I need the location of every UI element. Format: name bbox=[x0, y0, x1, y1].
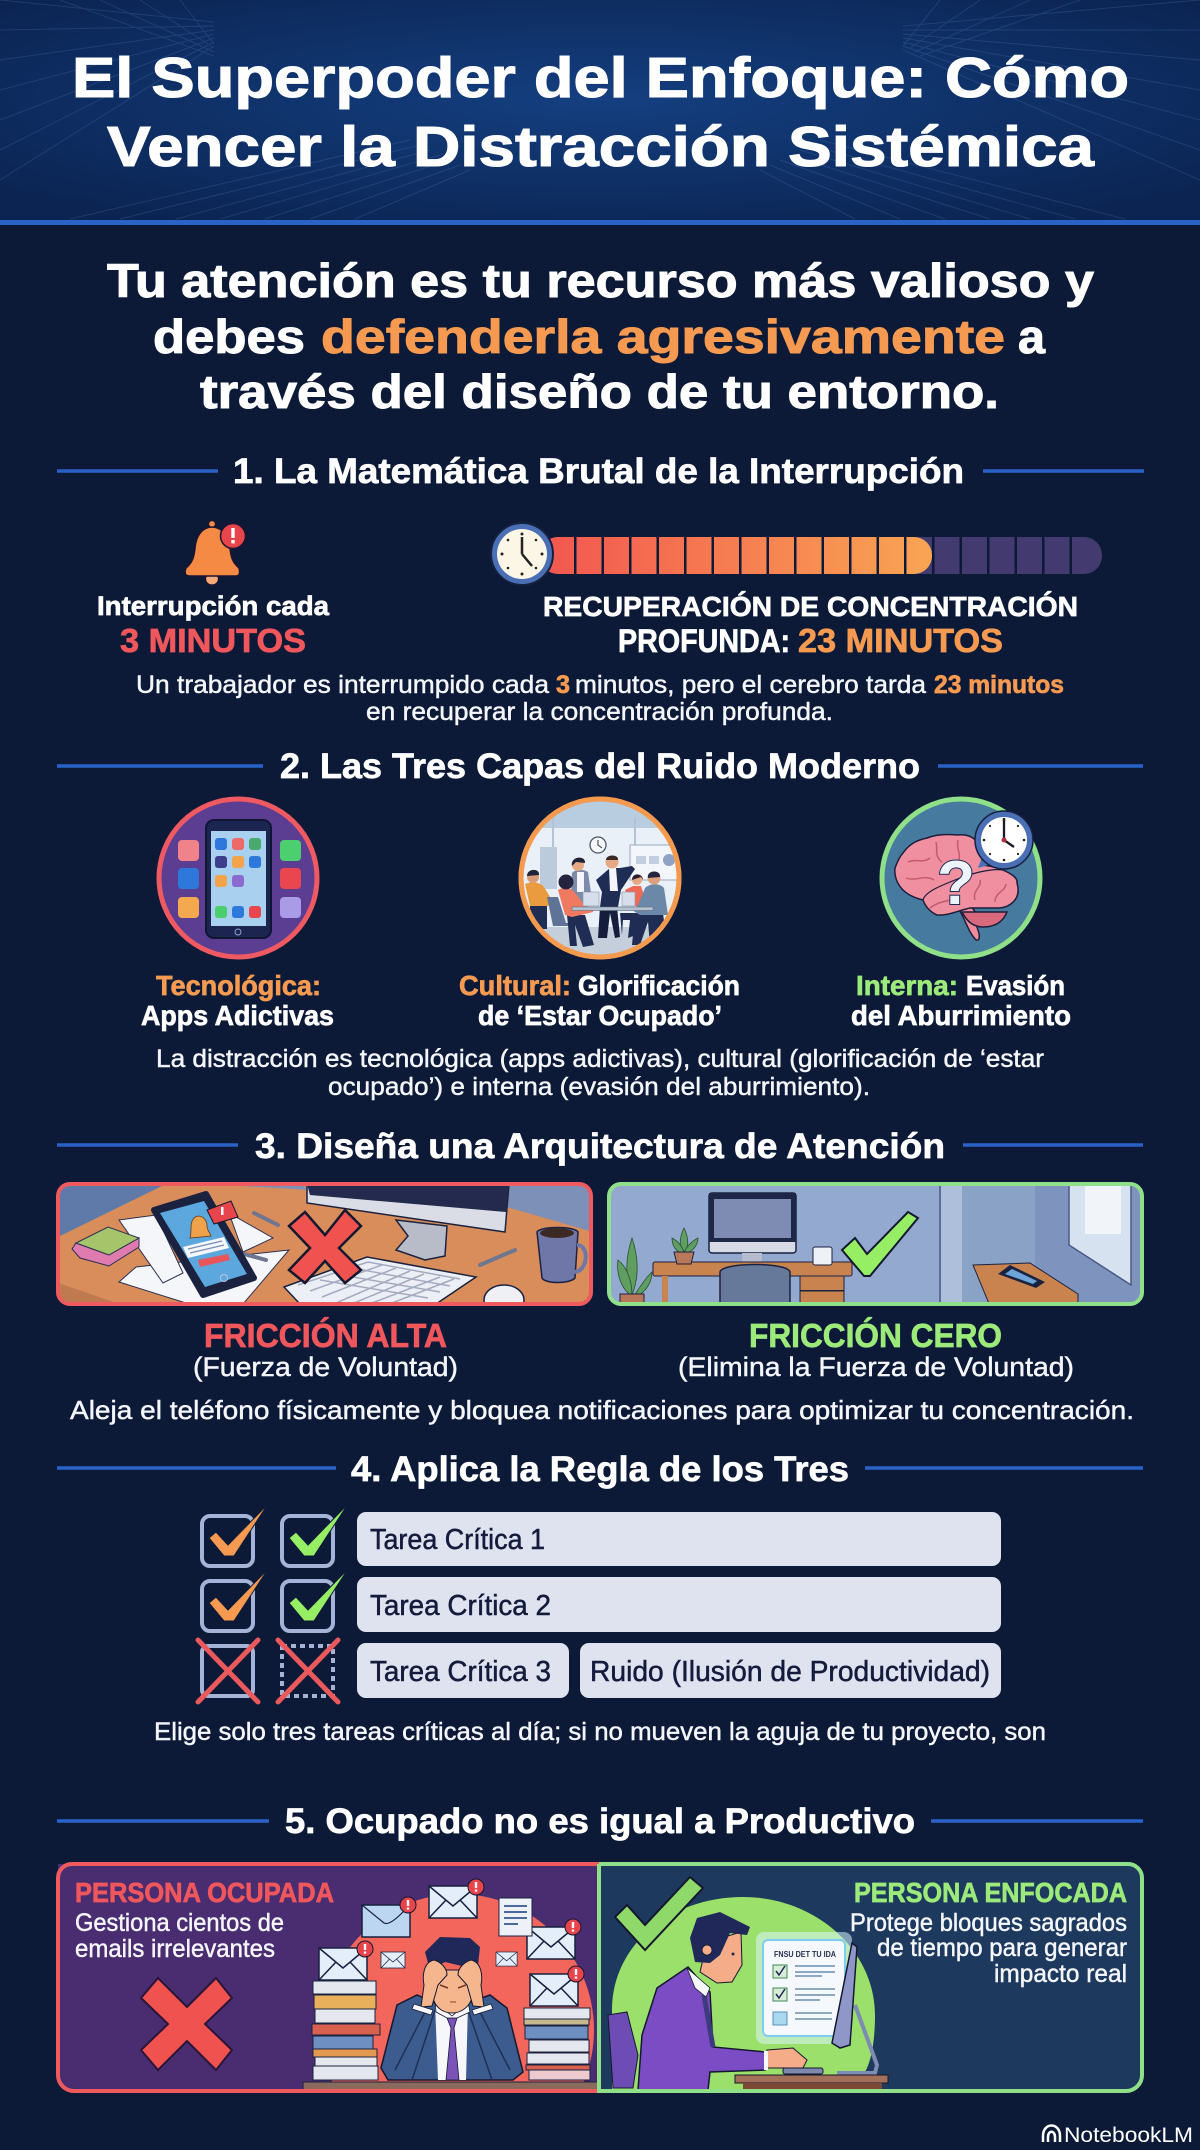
layer labels: Tecnológica: bbox=[156, 970, 321, 1001]
icon: clock bbox=[491, 523, 553, 585]
header band bbox=[0, 0, 1200, 221]
section 1 text: en recuperar la concentración profunda. bbox=[366, 698, 833, 726]
icon: brain and clock circle: ? bbox=[937, 849, 975, 918]
papers bbox=[119, 1213, 289, 1304]
friction labels: FRICCIÓN CERO bbox=[749, 1317, 1002, 1354]
focused man bbox=[638, 1912, 807, 2090]
section 1 heading: 1. La Matemática Brutal de la Interrupción bbox=[233, 452, 964, 491]
section 2 text bbox=[156, 1045, 1044, 1101]
interruption label: Interrupción cada bbox=[97, 591, 330, 621]
red cross bbox=[289, 1210, 361, 1283]
section 1 text: 3 bbox=[556, 671, 570, 699]
interruption label: 3 MINUTOS bbox=[120, 622, 306, 659]
monitor bbox=[832, 1943, 877, 2073]
checklist icons bbox=[198, 1504, 348, 1702]
mug bbox=[537, 1228, 586, 1282]
mouse bbox=[483, 1284, 525, 1302]
focused person text: Protege bloques sagrados bbox=[850, 1909, 1127, 1937]
section 1 text: minutos, pero el cerebro tarda bbox=[575, 671, 926, 699]
table and laptops bbox=[572, 892, 653, 910]
focused person text: impacto real bbox=[994, 1960, 1127, 1988]
section 1 text: Un trabajador es interrumpido cada bbox=[136, 671, 549, 699]
standing presenter bbox=[596, 856, 635, 938]
section 2 heading: 2. Las Tres Capas del Ruido Moderno bbox=[280, 747, 920, 786]
task list bbox=[357, 1512, 1001, 1698]
document bbox=[499, 1898, 532, 1936]
header rule bbox=[0, 220, 1200, 225]
busy person text bbox=[75, 1877, 334, 1963]
thesis statement: a bbox=[1018, 310, 1046, 363]
pen bbox=[480, 1250, 515, 1265]
interruption label bbox=[97, 591, 330, 659]
busy person text: emails irrelevantes bbox=[75, 1935, 275, 1963]
icon: bell bbox=[185, 520, 246, 585]
thesis statement: defenderla agresivamente bbox=[321, 310, 1005, 363]
layer labels: Glorificación bbox=[578, 970, 740, 1001]
recovery label: RECUPERACIÓN DE CONCENTRACIÓN bbox=[543, 591, 1078, 622]
green check bbox=[842, 1212, 918, 1276]
layer labels: de ‘Estar Ocupado’ bbox=[478, 1000, 722, 1031]
friction labels: FRICCIÓN ALTA bbox=[204, 1317, 447, 1354]
section 1 text bbox=[136, 671, 1064, 726]
recovery label: PROFUNDA: bbox=[618, 623, 790, 659]
thesis statement: debes bbox=[153, 310, 305, 363]
stacked books bbox=[312, 1981, 590, 2080]
standing woman bbox=[571, 858, 591, 912]
plants bbox=[618, 1228, 698, 1296]
layer labels: Interna: bbox=[856, 970, 958, 1001]
panel: cluttered desk bbox=[56, 1182, 593, 1315]
pens bbox=[244, 1213, 278, 1260]
keyboard bbox=[284, 1257, 476, 1304]
friction labels: (Elimina la Fuerza de Voluntad) bbox=[678, 1352, 1074, 1382]
plant pots bbox=[620, 1252, 694, 1306]
recovery progress bar bbox=[540, 537, 1102, 574]
red cross bbox=[141, 1978, 232, 2070]
glowing document: FNSU DET TU IDA bbox=[774, 1950, 836, 1959]
section 2 text: ocupado’) e interna (evasión del aburrimiento). bbox=[328, 1073, 870, 1101]
focused person text: PERSONA ENFOCADA bbox=[854, 1877, 1127, 1908]
envelopes bbox=[319, 1879, 584, 2006]
layer labels: del Aburrimiento bbox=[851, 1000, 1071, 1031]
chair bbox=[608, 2012, 638, 2088]
section 5 heading: 5. Ocupado no es igual a Productivo bbox=[285, 1802, 915, 1841]
desk bbox=[653, 1262, 852, 1306]
icon: smartphone circle bbox=[159, 799, 317, 957]
desk bbox=[734, 2068, 888, 2089]
task list: Tarea Crítica 2 bbox=[370, 1590, 551, 1622]
section 4 heading: 4. Aplica la Regla de los Tres bbox=[351, 1450, 849, 1489]
layer labels: Evasión bbox=[966, 970, 1065, 1001]
friction labels: (Fuerza de Voluntad) bbox=[193, 1352, 458, 1382]
NotebookLM logo: NotebookLM bbox=[1064, 2124, 1193, 2147]
thesis statement: Tu atención es tu recurso más valioso y bbox=[107, 254, 1094, 307]
title: Vencer la Distracción Sistémica bbox=[107, 115, 1095, 179]
panel: clean desk bbox=[607, 1182, 1144, 1306]
side table bbox=[973, 1263, 1078, 1306]
panel: busy person bbox=[56, 1862, 599, 2093]
monitor bbox=[709, 1193, 796, 1263]
focused person text bbox=[850, 1877, 1127, 1988]
monitor bbox=[307, 1184, 509, 1260]
busy person text: Gestiona cientos de bbox=[75, 1909, 284, 1937]
task list: Tarea Crítica 3 bbox=[370, 1656, 551, 1688]
title bbox=[72, 46, 1129, 179]
icon: brain and clock circle bbox=[882, 799, 1040, 957]
stressed man bbox=[381, 1937, 523, 2080]
title: El Superpoder del Enfoque: Cómo bbox=[72, 46, 1129, 110]
task list: Ruido (Ilusión de Productividad) bbox=[590, 1656, 990, 1688]
recovery label: 23 MINUTOS bbox=[798, 622, 1003, 659]
busy person text: PERSONA OCUPADA bbox=[75, 1877, 334, 1908]
layer labels bbox=[141, 970, 1071, 1031]
thesis statement: través del diseño de tu entorno. bbox=[200, 365, 999, 418]
panel: focused person bbox=[599, 1862, 1144, 2093]
window bbox=[1069, 1184, 1131, 1285]
glow behind document bbox=[756, 1932, 852, 2044]
chair bbox=[720, 1264, 790, 1306]
section 3 heading: 3. Diseña una Arquitectura de Atención bbox=[255, 1127, 945, 1166]
icon: office meeting circle bbox=[521, 799, 681, 967]
cup bbox=[813, 1247, 832, 1265]
section 1 text: 23 minutos bbox=[934, 671, 1064, 699]
green check bbox=[615, 1877, 703, 1950]
section 2 text: La distracción es tecnológica (apps adictivas), cultural (glorificación de ‘estar bbox=[156, 1045, 1044, 1073]
task list: Tarea Crítica 1 bbox=[370, 1524, 545, 1556]
thesis statement bbox=[107, 254, 1094, 418]
seated people bbox=[525, 870, 668, 947]
phone bbox=[154, 1194, 254, 1295]
glowing document bbox=[763, 1940, 845, 2036]
layer labels: Cultural: bbox=[459, 970, 571, 1001]
section 3 text: Aleja el teléfono físicamente y bloquea notificaciones para optimizar tu concentración. bbox=[70, 1395, 1134, 1425]
desk edge bbox=[302, 2082, 597, 2089]
recovery label bbox=[543, 591, 1078, 659]
focused person text: de tiempo para generar bbox=[877, 1934, 1127, 1962]
sticky pads bbox=[72, 1227, 139, 1266]
friction labels bbox=[193, 1317, 1074, 1382]
layer labels: Apps Adictivas bbox=[141, 1000, 334, 1031]
section 4 text: Elige solo tres tareas críticas al día; si no mueven la aguja de tu proyecto, son bbox=[154, 1718, 1046, 1746]
